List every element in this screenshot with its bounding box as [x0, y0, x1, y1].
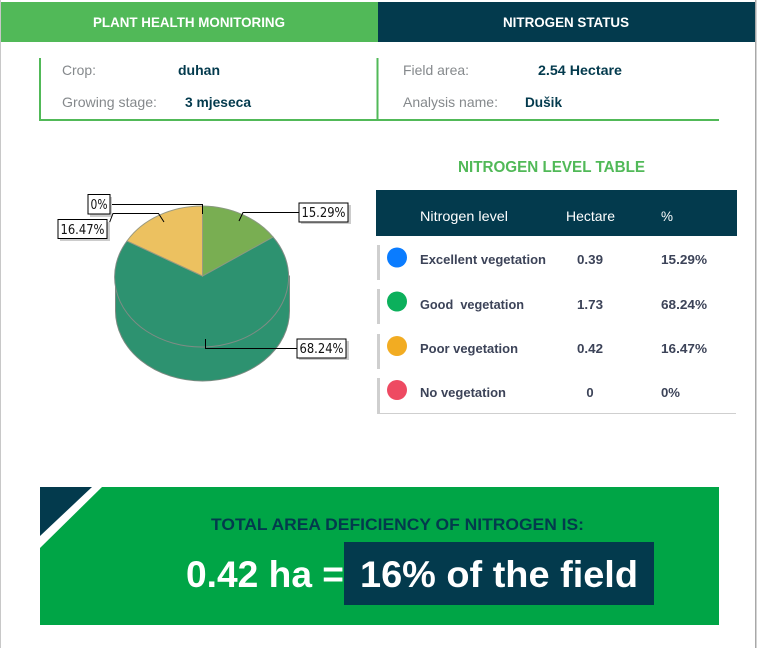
field area field: 2.54 Hectare	[538, 62, 622, 78]
header: nitrogen status: NITROGEN STATUS	[503, 14, 629, 30]
field area field	[403, 62, 622, 78]
row: excellent vegetation: 15.29%	[661, 252, 707, 267]
table: nitrogen levels	[376, 190, 737, 414]
row: good vegetation: Good vegetation	[420, 297, 524, 312]
percent callout: 16% of the field	[360, 554, 638, 595]
row: good vegetation: 68.24%	[661, 297, 707, 312]
row: poor vegetation: Poor vegetation	[420, 341, 518, 356]
row: no vegetation	[377, 378, 736, 414]
table header: Nitrogen level	[420, 208, 508, 224]
analysis name field: Dušik	[525, 94, 562, 110]
row: poor vegetation	[377, 334, 707, 369]
label: 68.24%	[206, 339, 349, 360]
label: 15.29%: 15.29%	[302, 206, 346, 221]
row: poor vegetation: 0.42	[577, 341, 603, 356]
slice: excellent vegetation 15.29%	[202, 206, 273, 276]
label: 15.29%	[239, 203, 351, 224]
field area field: Field area:	[403, 62, 469, 78]
label: 0%	[88, 194, 202, 217]
banner heading: TOTAL AREA DEFICIENCY OF NITROGEN IS:	[211, 515, 584, 534]
growing stage field: Growing stage:	[62, 94, 157, 110]
analysis name field	[403, 94, 562, 110]
row: excellent vegetation: 0.39	[577, 252, 603, 267]
row: excellent vegetation: Excellent vegetation	[420, 252, 546, 267]
label: 68.24%: 68.24%	[300, 342, 344, 357]
slice: poor vegetation 16.47%	[127, 206, 202, 276]
row: good vegetation: 1.73	[577, 297, 603, 312]
table header: Hectare	[566, 208, 615, 224]
header: plant health monitoring: PLANT HEALTH MONITORING	[93, 14, 285, 30]
pie side wall	[116, 276, 290, 381]
slice: good vegetation 68.24%	[115, 237, 289, 347]
area value: 0.42 ha =	[186, 554, 344, 595]
pie chart	[58, 194, 351, 381]
row: no vegetation: No vegetation	[420, 385, 506, 400]
table header	[376, 190, 737, 236]
crop field: duhan	[178, 62, 220, 78]
header: plant health monitoring	[1, 2, 378, 42]
crop field	[62, 62, 220, 78]
crop field: Crop:	[62, 62, 96, 78]
table header: %	[661, 208, 673, 224]
label: 0%: 0%	[90, 198, 108, 213]
label: 16.47%	[58, 214, 164, 241]
percent callout	[344, 542, 654, 605]
row: excellent vegetation	[377, 245, 707, 280]
row: poor vegetation: 16.47%	[661, 341, 707, 356]
growing stage field: 3 mjeseca	[185, 94, 251, 110]
row: no vegetation: 0	[586, 385, 594, 400]
panel: field information	[40, 58, 719, 120]
analysis name field: Analysis name:	[403, 94, 498, 110]
banner: total area deficiency	[40, 487, 719, 625]
row: no vegetation: 0%	[661, 385, 680, 400]
corner accent	[40, 487, 102, 548]
row: good vegetation	[377, 289, 707, 324]
header: nitrogen status	[378, 2, 755, 42]
growing stage field	[62, 94, 251, 110]
label: 16.47%: 16.47%	[60, 223, 104, 238]
heading: nitrogen level table: NITROGEN LEVEL TABLE	[458, 159, 645, 176]
